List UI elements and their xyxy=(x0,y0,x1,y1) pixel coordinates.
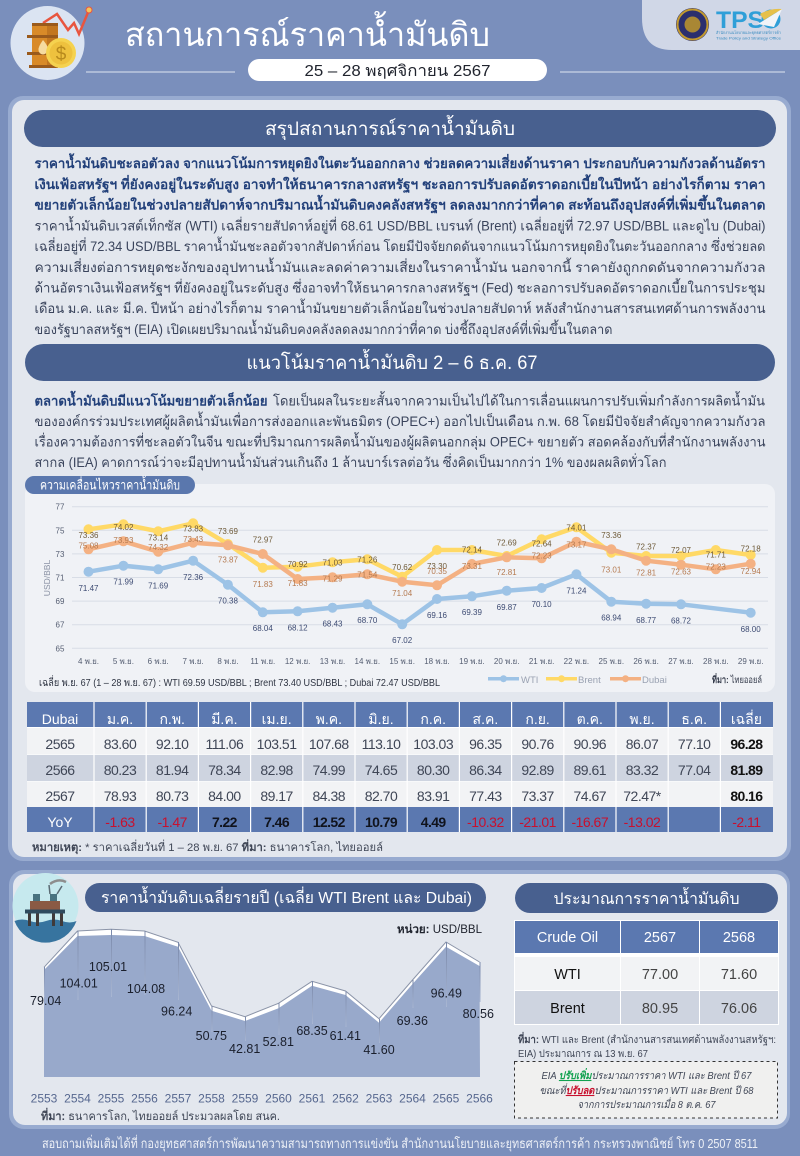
year axis: 2557 xyxy=(165,1092,192,1106)
text block: outlook: โดยเป็นผลในระยะสั้นจากความเป็นไปได้ในการเลื่อนแผนการปรับเพิ่มกำลังการผลิตน้ำมัน xyxy=(273,391,765,409)
table header: ก.พ. xyxy=(159,711,185,727)
data labels: 79.04 xyxy=(30,994,61,1008)
x axis: 20 พ.ย. xyxy=(494,657,519,666)
data labels: 104.01 xyxy=(60,976,98,990)
row 2565: 2565 xyxy=(45,736,75,752)
heading: annual price: ราคาน้ำมันดิบเฉลี่ยรายปี (เฉลี่ย WTI Brent และ Dubai) xyxy=(101,886,472,907)
heading: outlook xyxy=(25,344,775,381)
data labels: WTI: 69.39 xyxy=(462,608,482,617)
row 2567: 78.93 xyxy=(104,788,137,804)
callout: EIA revision: จากการประมาณการเมื่อ 8 ต.ค. 67 xyxy=(578,1097,717,1111)
y axis: 77 xyxy=(56,503,65,512)
forecast source xyxy=(518,1031,776,1060)
TPSO wordmark: สำนักงานนโยบายและยุทธศาสตร์การค้า xyxy=(716,30,781,36)
data labels: Dubai: 72.81 xyxy=(497,568,517,577)
text block: summary xyxy=(34,153,766,338)
x axis: 7 พ.ย. xyxy=(183,657,204,666)
y axis: 75 xyxy=(56,526,65,535)
data labels: Dubai: 71.83 xyxy=(288,579,308,588)
row 2566: 92.89 xyxy=(521,762,555,778)
data labels: Dubai: 72.23 xyxy=(706,562,726,571)
table header: เฉลี่ย xyxy=(731,710,762,727)
data labels: Dubai: 72.94 xyxy=(741,567,761,576)
data labels: 69.36 xyxy=(397,1014,428,1028)
row 2567: 2567 xyxy=(45,788,75,804)
data labels: WTI: 72.36 xyxy=(183,573,204,582)
row 2565: 77.10 xyxy=(678,736,711,752)
x axis xyxy=(78,657,763,666)
row 2566: 80.23 xyxy=(104,762,137,778)
data labels: Brent: 72.64 xyxy=(532,539,552,548)
table: price forecast: Crude Oil xyxy=(537,930,598,946)
icon: ministry emblem xyxy=(676,8,709,41)
forecast source: ที่มา: WTI และ Brent (สำนักงานสารสนเทศด้านพลังงานสหรัฐฯ: xyxy=(518,1031,776,1046)
series: Dubai xyxy=(88,541,751,585)
row 2565: 92.10 xyxy=(156,736,189,752)
heading: outlook: แนวโน้มราคาน้ำมันดิบ 2 – 6 ธ.ค. 67 xyxy=(246,349,538,374)
icon: offshore oil platform xyxy=(12,873,78,943)
data labels: Dubai: 73.31 xyxy=(462,562,482,571)
table header: Dubai xyxy=(42,711,78,727)
data labels: 96.24 xyxy=(161,1004,192,1018)
data labels: Brent: 71.71 xyxy=(706,551,726,560)
row 2565: 90.76 xyxy=(521,736,555,752)
text block: summary: ราคาน้ำมันดิบชะลอตัวลง จากแนวโน้มการหยุดยิงในตะวันออกกลาง ช่วยลดความเสี่ยงด้านราคา ประกอบกับความกังวลด้านอัตรา xyxy=(34,153,766,172)
row YoY: -1.63 xyxy=(105,814,135,830)
x axis: 22 พ.ย. xyxy=(564,657,589,666)
row YoY: -1.47 xyxy=(157,814,188,830)
monthly average note: เฉลี่ย พ.ย. 67 (1 – 28 พ.ย. 67) : WTI 69.59 USD/BBL ; Brent 73.40 USD/BBL ; Dubai 72.47 USD/BBL xyxy=(39,675,440,689)
row 2565: 111.06 xyxy=(206,736,244,752)
row YoY: 10.79 xyxy=(365,814,398,830)
year axis: 2559 xyxy=(232,1092,259,1106)
data labels: WTI: 68.00 xyxy=(741,625,761,634)
row YoY: 4.49 xyxy=(421,814,446,830)
year axis: 2554 xyxy=(64,1092,91,1106)
data labels: WTI: 68.77 xyxy=(636,616,657,625)
x axis: 14 พ.ย. xyxy=(355,657,380,666)
row 2565: 96.35 xyxy=(469,736,502,752)
data labels: Brent: 73.30 xyxy=(427,562,448,571)
row 2567: 73.37 xyxy=(521,788,555,804)
data labels: Dubai: 73.87 xyxy=(218,556,238,565)
table: price forecast xyxy=(514,920,779,1025)
data labels: WTI: 67.02 xyxy=(392,636,413,645)
data labels: Brent: 74.01 xyxy=(566,523,587,532)
TPSO wordmark: Trade Policy and Strategy Office xyxy=(716,36,782,40)
year axis: 2553 xyxy=(31,1092,58,1106)
year axis: 2561 xyxy=(299,1092,326,1106)
table: Dubai monthly prices xyxy=(27,702,773,832)
table: price forecast: 71.60 xyxy=(721,967,757,983)
year axis xyxy=(31,1092,493,1106)
data labels: Dubai: 71.29 xyxy=(322,574,343,583)
table: price forecast: 76.06 xyxy=(721,1001,757,1017)
text block: summary: เฉลี่ยอยู่ที่ 72.34 USD/BBL ราคาน้ำมันชะลอตัวจากสัปดาห์ก่อน โดยมีปัจจัยกดดันจากแนวโน้มการหยุดยิงในตะวันออกกลาง ซึ่งช่วยลด xyxy=(34,236,766,255)
text block: summary: เดือน ม.ค. และ มี.ค. ปีหน้า อย่างไรก็ตาม ราคาน้ำมันขยายตัวเล็กน้อยในช่วงปลายสัปดาห์ หลังสำนักงานสารสนเทศด้านการพลังงาน xyxy=(34,298,766,316)
data labels: 52.81 xyxy=(263,1035,294,1049)
data labels: WTI: 68.04 xyxy=(253,624,273,633)
data labels: WTI: 68.94 xyxy=(601,614,622,623)
data labels: WTI: 70.10 xyxy=(532,600,552,609)
text block: outlook: เรื่องความต้องการที่ชะลอตัวในจีน ขณะที่ปริมาณการผลิตน้ำมันของผู้ผลิตนอกกลุ่ม OPEC+ ขยายตัว สอดคล้องกับที่สำนักงานพลังงาน xyxy=(34,432,766,451)
row 2566: 2566 xyxy=(45,762,75,778)
data labels: Dubai xyxy=(78,535,761,598)
row 2567: 89.17 xyxy=(260,788,294,804)
table header: พ.ค. xyxy=(316,711,342,727)
table: price forecast: 77.00 xyxy=(642,967,678,983)
year axis: 2564 xyxy=(399,1092,426,1106)
data labels: WTI: 71.47 xyxy=(78,584,99,593)
series: WTI xyxy=(88,561,751,624)
data labels: Dubai: 70.35 xyxy=(427,567,448,576)
data labels: Dubai: 71.54 xyxy=(357,571,378,580)
data labels: Dubai: 71.83 xyxy=(253,580,273,589)
data labels: Dubai: 73.93 xyxy=(113,536,134,545)
text block: summary: ของรัฐบาลสหรัฐฯ (EIA) เปิดเผยปริมาณน้ำมันดิบคงคลังลดลงมากกว่าที่คาด บ่งชี้ถึงอุปสงค์ที่เพิ่มขึ้นในตลาด xyxy=(34,319,612,338)
table header: เม.ย. xyxy=(262,711,292,727)
data labels: WTI: 69.16 xyxy=(427,611,448,620)
year axis: 2563 xyxy=(366,1092,393,1106)
data labels: Dubai: 72.63 xyxy=(671,568,692,577)
y axis: 65 xyxy=(56,644,65,653)
data labels: Brent: 74.02 xyxy=(113,523,134,532)
area chart: annual average price xyxy=(30,929,494,1106)
data labels: Brent: 70.92 xyxy=(288,560,308,569)
data labels: Brent: 73.83 xyxy=(183,525,204,534)
data labels: 105.01 xyxy=(89,960,127,974)
x axis: 4 พ.ย. xyxy=(78,657,99,666)
heading: price forecast xyxy=(515,883,778,913)
x axis: 6 พ.ย. xyxy=(148,657,169,666)
data labels: Dubai: 75.08 xyxy=(78,542,99,551)
heading: price forecast: ประมาณการราคาน้ำมันดิบ xyxy=(554,887,740,908)
table note: หมายเหตุ: * ราคาเฉลี่ยวันที่ 1 – 28 พ.ย. 67 ที่มา: ธนาคารโลก, ไทยออยล์ xyxy=(32,839,383,855)
row 2567: 74.67 xyxy=(574,788,607,804)
data labels: WTI: 68.12 xyxy=(288,623,308,632)
row YoY: 7.46 xyxy=(264,814,290,830)
data labels: Dubai: 71.04 xyxy=(392,589,413,598)
date pill xyxy=(86,59,785,81)
data labels: 80.56 xyxy=(463,1007,494,1021)
table: price forecast: 2568 xyxy=(723,930,755,946)
row 2566: 78.34 xyxy=(208,762,241,778)
table: price forecast: WTI xyxy=(554,967,581,983)
row 2566: 77.04 xyxy=(678,762,711,778)
row 2567: 84.00 xyxy=(208,788,241,804)
row 2566: 74.65 xyxy=(365,762,398,778)
table header: ก.ย. xyxy=(525,711,550,727)
x axis: 28 พ.ย. xyxy=(703,657,729,666)
row 2566: 82.98 xyxy=(260,762,294,778)
icon: oil barrel and coin: $ xyxy=(56,44,67,65)
x axis: 12 พ.ย. xyxy=(285,657,310,666)
icon: oil barrel and coin xyxy=(10,6,92,80)
table header: ก.ค. xyxy=(420,711,446,727)
row 2567: 83.91 xyxy=(417,788,450,804)
data labels: Brent: 72.69 xyxy=(497,538,517,547)
chart title pill xyxy=(25,476,195,494)
legend: Dubai xyxy=(642,675,667,686)
chart source: ที่มา: ไทยออยล์ xyxy=(712,672,762,686)
row 2565: 103.03 xyxy=(413,736,454,752)
row 2567: 77.43 xyxy=(469,788,502,804)
table header: ม.ค. xyxy=(107,711,133,727)
text block: summary: ความเสี่ยงต่อการหยุดชะงักของอุปทานน้ำมันและลดค่าความเสี่ยงในราคาน้ำมัน นอกจากนี้ ราคายังถูกกดดันจากความกังวล xyxy=(34,257,766,276)
year axis: 2562 xyxy=(332,1092,359,1106)
text block: summary: ขยายตัวเล็กน้อยในช่วงปลายสัปดาห์จากปริมาณน้ำมันดิบคงคลังสหรัฐฯ ลดลงมากกว่าที่คาด สะท้อนถึงอุปสงค์ที่เพิ่มขึ้นในตลาด xyxy=(34,194,766,214)
panel: annual price and forecast xyxy=(9,870,790,1129)
x axis: 19 พ.ย. xyxy=(459,657,485,666)
row 2567: 84.38 xyxy=(313,788,346,804)
logo panel xyxy=(642,0,800,50)
data labels: 68.35 xyxy=(296,1024,328,1038)
forecast source: EIA) ประมาณการ ณ 13 พ.ย. 67 xyxy=(518,1048,648,1060)
row YoY: -13.02 xyxy=(624,814,661,830)
table header: มี.ค. xyxy=(211,711,238,727)
series: Brent xyxy=(88,523,751,577)
x axis: 13 พ.ย. xyxy=(320,657,345,666)
data labels: 61.41 xyxy=(330,1029,361,1043)
text block: summary: เงินเฟ้อสหรัฐฯ ที่ยังคงอยู่ในระดับสูง อาจทำให้ธนาคารกลางสหรัฐฯ ชะลอการปรับลดอัตราดอกเบี้ยในปีหน้า อย่างไรก็ตาม ราคา xyxy=(34,174,765,194)
table header: ต.ค. xyxy=(577,711,603,727)
data labels: Brent: 71.03 xyxy=(322,558,343,567)
text block: outlook: ตลาดน้ำมันดิบมีแนวโน้มขยายตัวเล็กน้อย xyxy=(34,391,268,409)
data labels: WTI xyxy=(78,573,761,645)
data labels: Dubai: 74.32 xyxy=(148,543,169,552)
data labels: 96.49 xyxy=(431,986,462,1000)
y axis: USD/BBL xyxy=(42,560,52,596)
data labels: Brent: 73.36 xyxy=(601,531,622,540)
row 2566: 83.32 xyxy=(626,762,659,778)
table header xyxy=(42,710,762,727)
x axis: 21 พ.ย. xyxy=(529,657,554,666)
x axis: 5 พ.ย. xyxy=(113,657,134,666)
year axis: 2556 xyxy=(131,1092,158,1106)
data labels: 41.60 xyxy=(363,1043,395,1057)
year axis: 2566 xyxy=(466,1092,493,1106)
data labels: Brent: 72.07 xyxy=(671,546,692,555)
text block: outlook: สากล (IEA) คาดการณ์ว่าจะมีอุปทานน้ำมันส่วนเกินถึง 1 ล้านบาร์เรลต่อวัน ซึ่งคิดเป็นมากกว่า 1% ของผลผลิตทั่วโลก xyxy=(34,452,666,471)
row 2567: 72.47* xyxy=(623,788,662,804)
y axis: 69 xyxy=(56,597,65,606)
data labels: Dubai: 72.81 xyxy=(636,568,657,577)
y axis: 67 xyxy=(56,621,65,630)
text block: outlook xyxy=(34,391,766,471)
data labels: 42.81 xyxy=(229,1042,260,1056)
row 2565: 103.51 xyxy=(257,736,297,752)
drop lines xyxy=(44,929,480,1043)
data labels: WTI: 71.69 xyxy=(148,581,169,590)
y axis: 71 xyxy=(56,574,65,582)
data labels: WTI: 68.72 xyxy=(671,617,692,626)
row 2565 xyxy=(45,736,763,752)
y axis xyxy=(42,503,65,653)
row YoY: -16.67 xyxy=(571,814,609,830)
legend: WTI xyxy=(521,675,538,686)
data labels: WTI: 69.87 xyxy=(497,603,517,612)
data labels: Dubai: 73.01 xyxy=(601,566,622,575)
data labels: Brent: 72.14 xyxy=(462,545,482,554)
y axis: 73 xyxy=(56,550,65,559)
data labels: Dubai: 73.43 xyxy=(183,535,204,544)
row 2566: 89.61 xyxy=(574,762,607,778)
row 2566: 81.94 xyxy=(156,762,189,778)
data labels: Brent: 72.37 xyxy=(636,542,657,551)
row 2566: 80.30 xyxy=(417,762,450,778)
row 2565: 96.28 xyxy=(730,736,763,752)
x axis: 15 พ.ย. xyxy=(389,657,415,666)
data labels: Brent xyxy=(78,523,761,572)
x axis: 27 พ.ย. xyxy=(668,657,694,666)
year axis: 2560 xyxy=(265,1092,292,1106)
row YoY: -21.01 xyxy=(519,814,557,830)
date pill: 25 – 28 พฤศจิกายน 2567 xyxy=(304,63,490,80)
title: สถานการณ์ราคาน้ำมันดิบ xyxy=(125,11,490,53)
row YoY: -2.11 xyxy=(732,814,761,830)
row 2565: 83.60 xyxy=(104,736,137,752)
row YoY: YoY xyxy=(47,814,73,830)
year axis: 2555 xyxy=(98,1092,125,1106)
row 2566: 86.34 xyxy=(469,762,502,778)
row 2567: 80.16 xyxy=(730,788,763,804)
callout: EIA revision xyxy=(514,1062,778,1118)
data labels: 104.08 xyxy=(127,982,165,996)
data labels: 50.75 xyxy=(196,1029,227,1043)
text block: summary: ราคาน้ำมันดิบเวสต์เท็กซัส (WTI) เฉลี่ยรายสัปดาห์อยู่ที่ 68.61 USD/BBL เบรนท์ (Brent) เฉลี่ยอยู่ที่ 72.97 USD/BBL และดูไบ (Dubai) xyxy=(34,216,766,234)
unit label: หน่วย: USD/BBL xyxy=(397,923,483,936)
callout: EIA revision: ขณะที่ปรับลดประมาณการราคา WTI และ Brent ปี 68 xyxy=(540,1083,754,1097)
row YoY: -10.32 xyxy=(467,814,504,830)
row 2567: 80.73 xyxy=(156,788,189,804)
table header: มิ.ย. xyxy=(368,711,394,727)
x axis: 26 พ.ย. xyxy=(633,657,659,666)
row YoY: 7.22 xyxy=(212,814,238,830)
table: price forecast: 80.95 xyxy=(642,1001,678,1017)
x axis: 8 พ.ย. xyxy=(217,657,238,666)
data labels: WTI: 68.43 xyxy=(322,619,343,628)
data labels xyxy=(30,960,494,1057)
year axis: 2565 xyxy=(433,1092,460,1106)
data labels: WTI: 68.70 xyxy=(357,616,378,625)
callout: EIA revision: EIA ปรับเพิ่มประมาณการราคา WTI และ Brent ปี 67 xyxy=(542,1067,753,1082)
data labels: Brent: 72.97 xyxy=(253,535,273,544)
panel: summary and outlook xyxy=(8,96,791,861)
table: price forecast: Brent xyxy=(550,1001,585,1017)
row 2567 xyxy=(45,788,763,804)
data labels: Brent: 72.18 xyxy=(741,545,761,554)
data labels: Brent: 73.14 xyxy=(148,533,169,542)
x axis: 29 พ.ย. xyxy=(738,657,763,666)
x axis: 18 พ.ย. xyxy=(424,657,450,666)
text block: outlook: ขององค์กรร่วมประเทศผู้ผลิตน้ำมันเพื่อการส่งออกและพันธมิตร (OPEC+) ออกไปเป็นเดือน ก.พ. 68 โดยมีปัจจัยสำคัญจากความกังวล xyxy=(34,411,766,430)
TPSO wordmark: TPS xyxy=(716,7,764,34)
row 2567: 82.70 xyxy=(365,788,398,804)
legend xyxy=(488,675,667,686)
row 2565: 90.96 xyxy=(574,736,607,752)
data labels: WTI: 71.24 xyxy=(566,587,587,596)
data labels: Brent: 73.36 xyxy=(78,531,99,540)
table header: พ.ย. xyxy=(629,711,655,727)
year axis: 2558 xyxy=(198,1092,225,1106)
legend: Brent xyxy=(578,675,601,686)
row 2565: 86.07 xyxy=(626,736,659,752)
row 2565: 107.68 xyxy=(309,736,349,752)
chart title pill: ความเคลื่อนไหวราคาน้ำมันดิบ xyxy=(40,476,180,492)
table header: ส.ค. xyxy=(473,711,498,727)
x axis: 11 พ.ย. xyxy=(250,657,275,666)
line chart: price movement xyxy=(25,476,775,692)
heading: annual price xyxy=(85,883,486,912)
TPSO wordmark xyxy=(716,7,782,40)
x axis: 25 พ.ย. xyxy=(599,657,624,666)
table: price forecast: 2567 xyxy=(644,930,676,946)
heading: summary: สรุปสถานการณ์ราคาน้ำมันดิบ xyxy=(265,115,515,141)
row 2566: 81.89 xyxy=(730,762,763,778)
table header: ธ.ค. xyxy=(681,711,707,727)
data labels: WTI: 70.38 xyxy=(218,597,238,606)
data labels: Dubai: 72.23 xyxy=(532,552,552,561)
data labels: Brent: 73.69 xyxy=(218,527,238,536)
row 2566: 74.99 xyxy=(313,762,346,778)
row YoY xyxy=(47,814,761,830)
data labels: WTI: 71.99 xyxy=(113,578,134,587)
data labels: Dubai: 73.17 xyxy=(566,541,587,550)
row YoY: 12.52 xyxy=(313,814,346,830)
row 2566 xyxy=(45,762,763,778)
text block: summary: ด้านอัตราเงินเฟ้อสหรัฐฯ ที่ยังคงอยู่ในระดับสูง ซึ่งอาจทำให้ธนาคารกลางสหรัฐฯ (Fed) ชะลอการปรับลดอัตราดอกเบี้ยในการประชุม xyxy=(34,278,766,296)
data labels: Brent: 71.26 xyxy=(357,556,378,565)
heading: summary xyxy=(24,110,776,147)
annual chart source: ที่มา: ธนาคารโลก, ไทยออยล์ ประมวลผลโดย สนค. xyxy=(41,1107,280,1123)
row 2565: 113.10 xyxy=(362,736,401,752)
data labels: Brent: 70.62 xyxy=(392,563,413,572)
